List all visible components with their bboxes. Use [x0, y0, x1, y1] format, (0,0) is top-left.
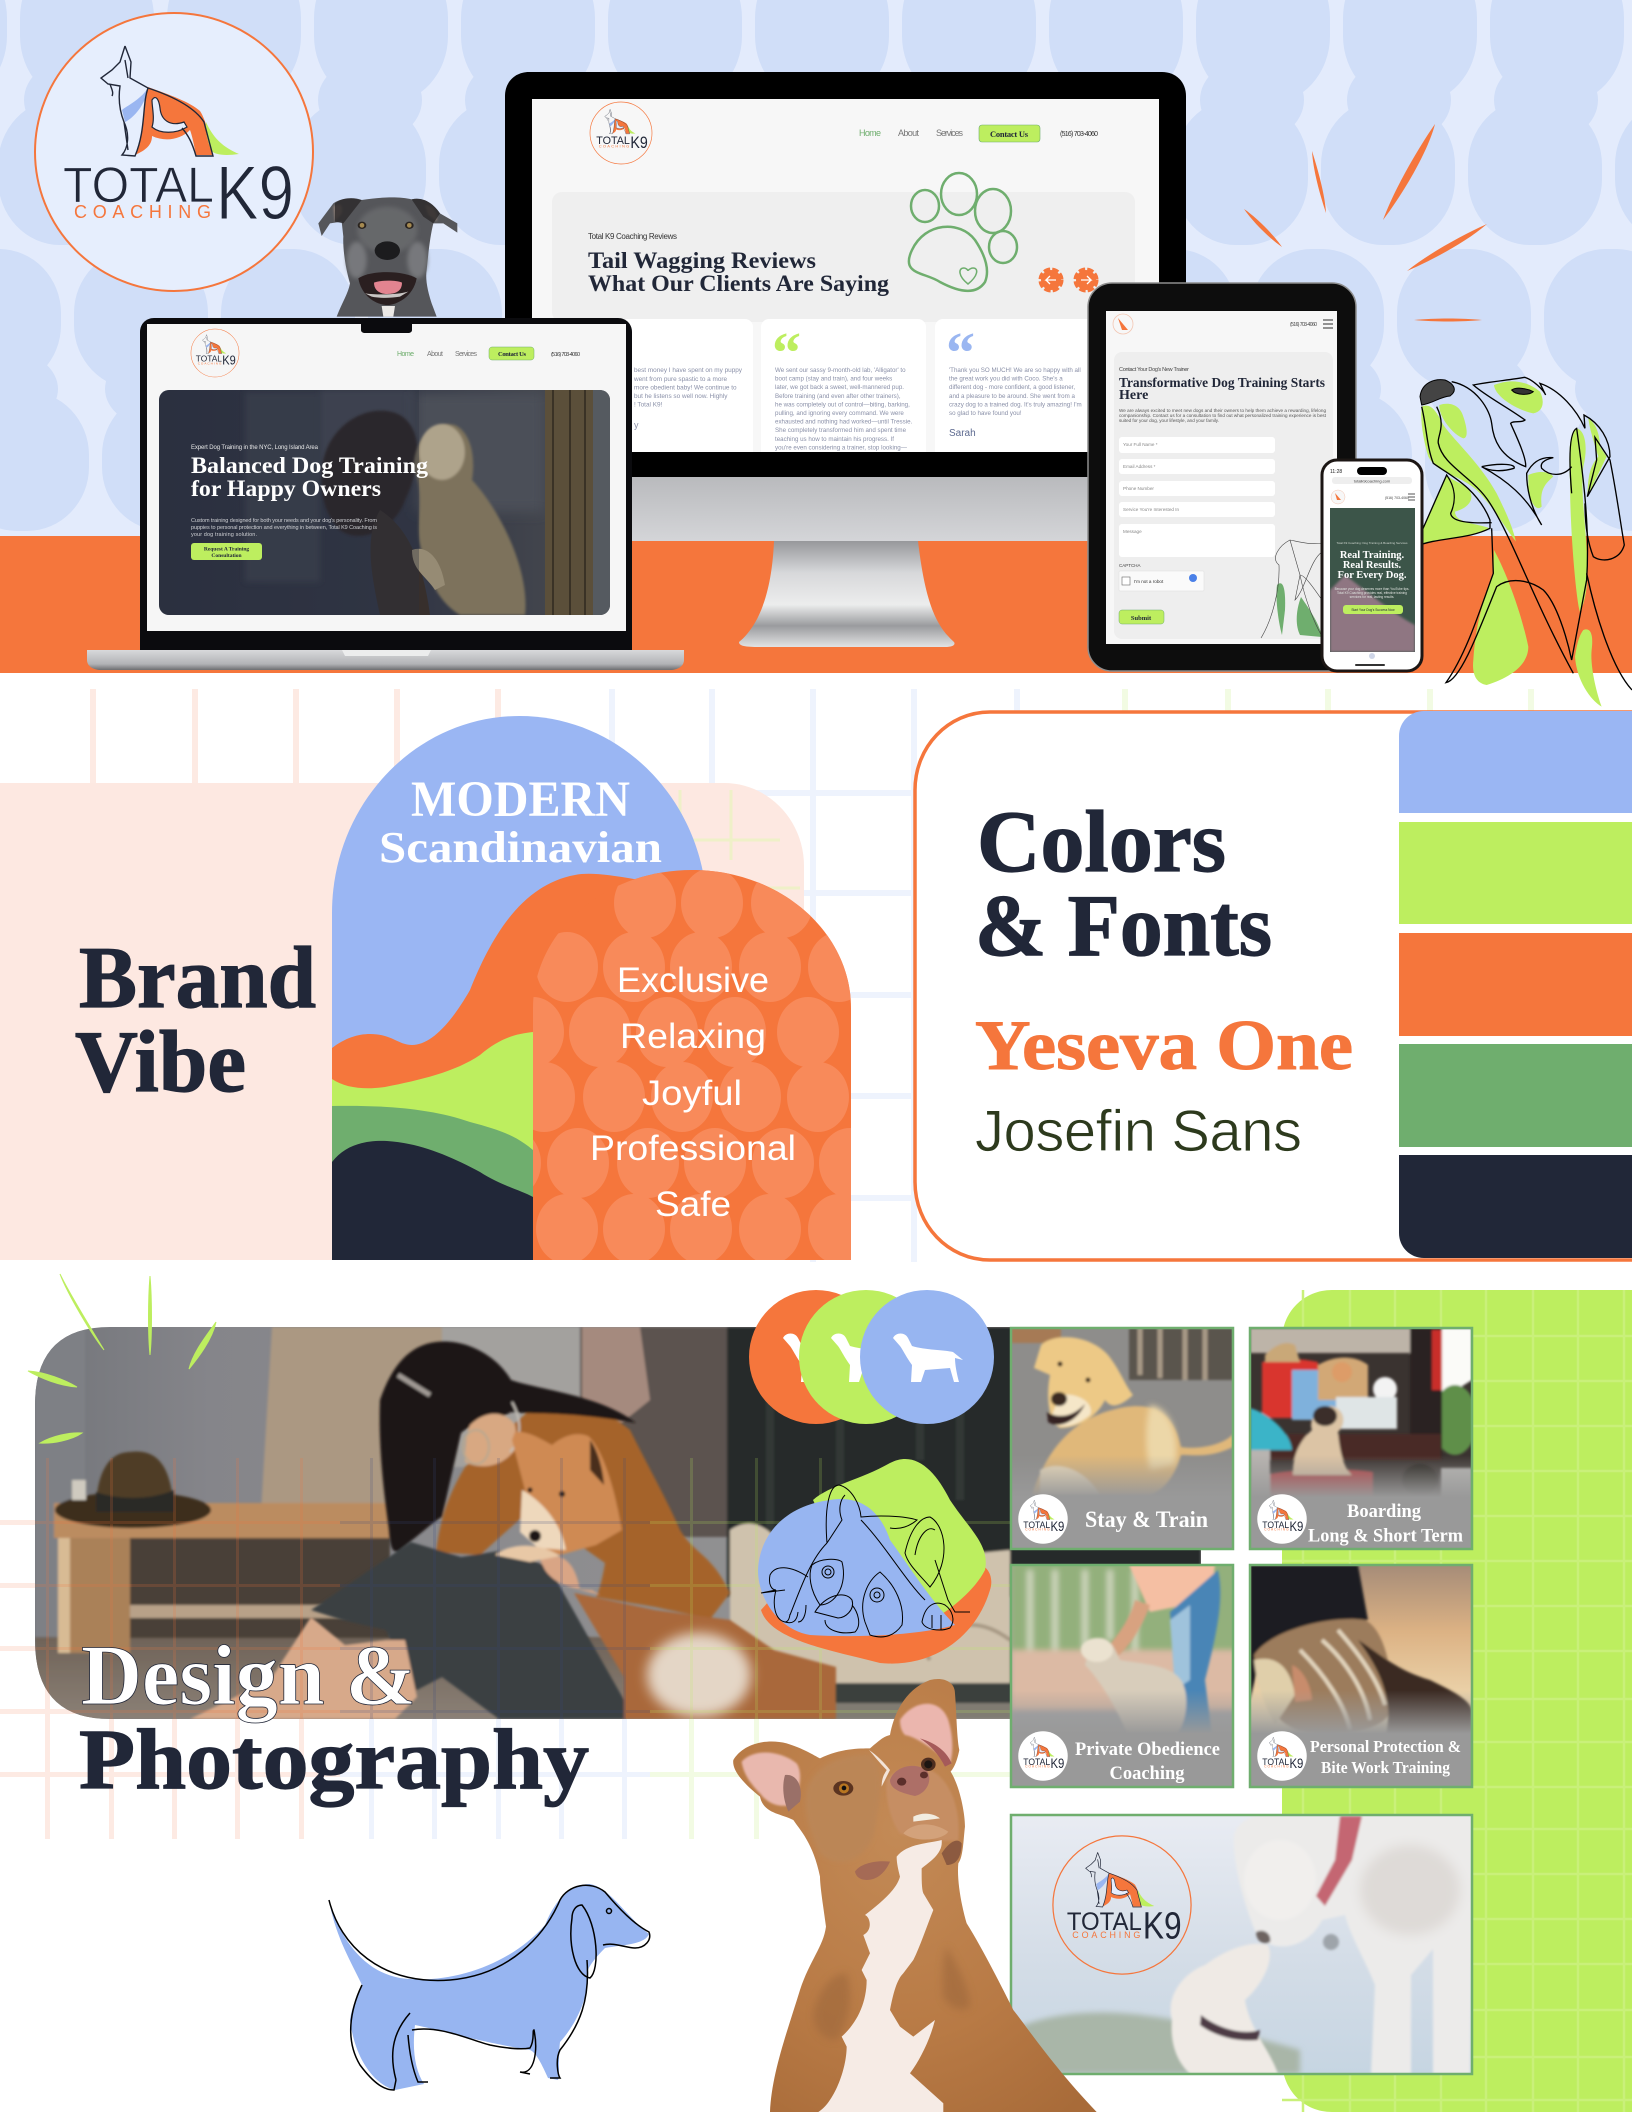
- laptop hero text: Request A Training: [204, 546, 249, 552]
- laptop base: [87, 650, 684, 670]
- tile caption: Stay & Train: [1085, 1507, 1208, 1532]
- laptop hero text: Balanced Dog Training: [191, 453, 429, 478]
- tile logo: [1257, 1494, 1307, 1544]
- tile logo: TOTAL: [1262, 1757, 1289, 1767]
- image tile: Personal Protection: [1250, 1565, 1472, 1787]
- tile logo: [1018, 1731, 1068, 1781]
- laptop hero text: for Happy Owners: [191, 476, 381, 501]
- phone hero image: For Every Dog.: [1338, 570, 1407, 581]
- tile logo: K9: [1289, 1519, 1303, 1534]
- phone bottom bar: [1355, 664, 1385, 666]
- device: phone: (516) 703-4060: [1385, 496, 1409, 500]
- laptop navigation: Services: [455, 351, 478, 358]
- eyes: [833, 1781, 853, 1796]
- review card left: [624, 319, 751, 430]
- laptop hero image: [159, 390, 610, 615]
- heading: Colors & Fonts: & Fonts: [975, 878, 1272, 975]
- illustration: bulldog line art on blobs: [758, 1459, 991, 1664]
- banner logo: K9: [1143, 1905, 1182, 1947]
- monitor navigation: (516) 703-4060: [1060, 131, 1098, 138]
- heading: Design & Photography: Photography: [79, 1711, 589, 1807]
- tablet form fields: Submit: [1131, 615, 1152, 622]
- device: phone: 11:28: [1330, 469, 1342, 475]
- monitor navigation: About: [898, 128, 919, 138]
- tablet heading: Here: [1119, 388, 1148, 403]
- tablet body: [1088, 283, 1356, 671]
- heading: Colors & Fonts: [975, 794, 1272, 975]
- phone hero image: [1330, 508, 1415, 652]
- phone hero image: Because your dog deserves more than YouTube tips.: [1335, 587, 1410, 591]
- text: Modern Scandinavian: Scandinavian: [379, 823, 662, 872]
- photo: brown and white pit bull looking up: [733, 1679, 1097, 2112]
- tablet heading: Transformative Dog Training Starts: [1119, 376, 1326, 391]
- review card middle: She completely transformed him and spent time: [775, 427, 907, 434]
- review card right: Sarah: [949, 428, 976, 439]
- text: brand attributes: Safe: [655, 1185, 731, 1224]
- phone hero image: Total K9 Coaching provides real, effective training: [1337, 591, 1407, 595]
- hair: [380, 1342, 636, 1551]
- review card left: but he listens so well now. Highly: [634, 393, 728, 400]
- tablet form panel: [1114, 352, 1333, 639]
- monitor navigation: [859, 125, 1098, 142]
- device: phone: totalk9coaching.com: [1354, 478, 1391, 484]
- panel: colors and fonts: [915, 711, 1632, 1260]
- banner logo: [1053, 1836, 1191, 1974]
- review card middle: We sent our sassy 9-month-old lab, 'Alligator' to: [775, 367, 906, 374]
- font sample: Josefin Sans: Josefin Sans: [975, 1099, 1302, 1164]
- tile logo: K9: [1050, 1519, 1064, 1534]
- monitor screen: Total K9 Coaching Reviews: [588, 232, 677, 241]
- review card middle: teaching us how to maintain his progress. If: [775, 436, 894, 443]
- tablet form fields: I'm not a robot: [1134, 579, 1164, 584]
- tablet form fields: Phone Number: [1123, 486, 1154, 491]
- background grid: photography section: [0, 1458, 1010, 1839]
- review card left: went from pure spastic to a more: [633, 376, 728, 383]
- banner logo: TOTAL: [1067, 1909, 1142, 1936]
- tile logo: TOTAL: [1023, 1520, 1050, 1530]
- review card right: different dog - more confident, a good listener,: [949, 384, 1075, 391]
- text: brand attributes: Joyful: [642, 1074, 742, 1113]
- review card right: “: [946, 320, 975, 385]
- review card middle: he was completely out of control—biting, barking,: [775, 401, 910, 408]
- tile caption: Coaching: [1110, 1764, 1185, 1784]
- image tile: Boarding: [1250, 1328, 1477, 1549]
- tile caption: [1308, 1502, 1464, 1546]
- review card left: more obedient baby! We continue to: [634, 384, 737, 392]
- legs: [190, 1617, 417, 1719]
- phone hero image: services for real, lasting results.: [1350, 595, 1394, 599]
- review card right: the great work you did with Coco. She's a: [949, 376, 1063, 383]
- small white dog: [1171, 1944, 1278, 2074]
- tablet form fields: CAPTCHA: [1119, 563, 1141, 568]
- chest white patch: [818, 1840, 943, 2112]
- heading: Brand Vibe: Vibe: [75, 1014, 246, 1111]
- review card middle: you're even considering a trainer, stop looking—: [775, 444, 908, 451]
- heading: Brand Vibe: [75, 930, 316, 1111]
- text: brand attributes: Exclusive: [617, 961, 769, 1000]
- tablet heading: [1119, 367, 1327, 423]
- laptop hero text: your dog training solution.: [191, 532, 257, 538]
- device: tablet: (516) 703-4060: [1290, 322, 1317, 328]
- dog body: [574, 1593, 836, 1719]
- review card left: best money I have spent on my puppy: [634, 367, 743, 374]
- text: Modern Scandinavian: MODERN: [411, 772, 630, 828]
- logo: Total K9 Coaching: K9: [216, 151, 294, 236]
- review card right: so glad to have found you!: [949, 410, 1022, 417]
- monitor logo: TOTAL: [596, 135, 630, 147]
- device: phone: [1322, 460, 1422, 671]
- tile logo: TOTAL: [1023, 1757, 1050, 1767]
- phone hero image: Total K9 Coaching: Dog Training & Boarding Services: [1336, 541, 1408, 545]
- tile caption: Personal Protection &: [1310, 1737, 1461, 1756]
- laptop navigation: Home: [397, 351, 414, 358]
- review card middle: exhausted and nothing had worked—until Tressie.: [775, 419, 913, 426]
- tablet line art dog: [1261, 540, 1323, 638]
- phone hero image: Start Your Dog's Success Now: [1351, 608, 1395, 612]
- heading: Colors & Fonts: Colors: [977, 794, 1226, 891]
- monitor screen: What Our Clients Are Saying: [588, 271, 890, 296]
- big white dog: [1234, 1816, 1472, 2074]
- tablet form fields: Message: [1123, 529, 1142, 534]
- laptop logo: COACHING: [198, 361, 222, 365]
- tablet screen: [1106, 311, 1337, 644]
- phone hero image: Real Results.: [1343, 560, 1402, 571]
- tile logo: COACHING: [1025, 1765, 1050, 1769]
- banner logo: COACHING: [1072, 1930, 1140, 1940]
- monitor logo: COACHING: [599, 144, 629, 149]
- laptop logo: K9: [222, 353, 236, 368]
- hands: [540, 1556, 600, 1595]
- panel: patterned top background: [0, 0, 1632, 673]
- phone mini logo: [1331, 490, 1345, 504]
- photo grid overlay: [35, 1458, 1010, 1719]
- monitor bezel: [505, 72, 1186, 477]
- laptop body: [140, 318, 632, 650]
- review card right: [937, 319, 1087, 436]
- laptop screen: [147, 324, 626, 631]
- monitor logo: K9: [630, 133, 648, 152]
- tile logo: [1257, 1731, 1307, 1781]
- tile caption: Long & Short Term: [1308, 1526, 1464, 1546]
- panel: blue arch with waves: [332, 716, 707, 1260]
- review card right: 'Thank you SO MUCH! We are so happy with all: [949, 367, 1081, 374]
- monitor stand: [739, 541, 955, 647]
- laptop navigation: Contact Us: [498, 351, 526, 358]
- laptop navigation: [397, 347, 580, 360]
- monitor navigation: Home: [859, 128, 881, 138]
- review card middle: “: [772, 320, 801, 385]
- laptop hero text: Expert Dog Training in the NYC, Long Island Area: [191, 445, 319, 451]
- font sample: Yeseva One: Yeseva One: [975, 1007, 1353, 1085]
- tablet form fields: Service You're Interested In: [1123, 507, 1179, 512]
- image banner: two white dogs with logo: [1011, 1815, 1472, 2074]
- laptop logo: TOTAL: [196, 354, 222, 364]
- tablet heading: We are always excited to meet new dogs and their owners to help them achieve a rewarding, lifelong: [1119, 408, 1326, 413]
- face: [465, 1414, 518, 1466]
- tile caption: [1075, 1740, 1220, 1784]
- sweater: [436, 1399, 730, 1618]
- panel: brand vibe background: [0, 783, 804, 1260]
- decoration: orange sparks: [1244, 124, 1487, 322]
- photo: grey pit bull peeking above laptop: [318, 197, 457, 317]
- reviews heading panel: [552, 192, 1135, 322]
- image tile: Private Obedience Coaching: [1011, 1560, 1241, 1790]
- tile caption: Boarding: [1347, 1502, 1422, 1522]
- decoration: lime sparks: [28, 1274, 216, 1443]
- tile logo: COACHING: [1025, 1528, 1050, 1532]
- heading: Design & Photography: Design &: [81, 1627, 416, 1723]
- review card middle: boot camp (stay and train), and four weeks: [775, 376, 892, 383]
- laptop logo: [191, 329, 239, 377]
- tile logo: COACHING: [1264, 1528, 1289, 1532]
- review card middle: later, we got back a sweet, well-mannered pup.: [775, 384, 904, 391]
- tile logo: COACHING: [1264, 1765, 1289, 1769]
- review card middle: pulling, and ignoring every command. We were: [775, 410, 904, 417]
- phone status bar: [1357, 467, 1387, 475]
- monitor screen: [532, 99, 1159, 459]
- review card middle: Before training (and even after other trainers),: [775, 393, 901, 400]
- text: brand attributes: Professional: [590, 1129, 796, 1168]
- tile caption: Private Obedience: [1075, 1740, 1220, 1760]
- heading: Design & Photography: [79, 1627, 589, 1807]
- text: brand attributes: [590, 961, 796, 1224]
- tablet heading: Contact Your Dog's New Trainer: [1119, 367, 1189, 373]
- text: brand attributes: Relaxing: [620, 1017, 766, 1056]
- background grid: brand section: [90, 689, 1534, 1262]
- tile logo: K9: [1050, 1756, 1064, 1771]
- tablet form fields: Your Full Name *: [1123, 442, 1158, 447]
- review card right: and a pleasure to be around. She went from a: [949, 393, 1075, 400]
- mouth corner: [855, 1861, 890, 1880]
- icon group: three overlapping dog circles: [749, 1290, 994, 1424]
- laptop navigation: About: [427, 351, 443, 358]
- device: laptop: [87, 318, 684, 670]
- laptop hero text: Consultation: [211, 553, 242, 559]
- tablet form fields: Email Address *: [1123, 464, 1156, 469]
- icon: paw outline: [909, 173, 1017, 291]
- laptop hero text: [191, 445, 429, 560]
- phone hero image: Real Training.: [1340, 550, 1405, 561]
- tablet form fields: [1119, 437, 1275, 624]
- muzzle: [886, 1767, 959, 1841]
- review card left: ! Total K9!: [634, 402, 663, 408]
- monitor navigation: Services: [936, 128, 964, 138]
- monitor navigation: Contact Us: [990, 129, 1029, 139]
- tile logo: TOTAL: [1262, 1520, 1289, 1530]
- tile logo: [1018, 1494, 1068, 1544]
- heading: Brand Vibe: Brand: [79, 930, 316, 1027]
- jeans: [311, 1542, 624, 1719]
- color swatches: [1399, 711, 1632, 1258]
- panel: lime grid background: [1282, 1290, 1632, 2112]
- tablet mini logo: [1113, 314, 1133, 334]
- monitor screen: Tail Wagging Reviews: [588, 248, 816, 273]
- device: desktop monitor: [505, 72, 1186, 647]
- photo: woman hugging shiba dog: [35, 1327, 1201, 1719]
- tile caption: [1310, 1737, 1461, 1777]
- laptop navigation: (516) 703-4060: [551, 352, 580, 358]
- device: tablet: [1088, 283, 1356, 671]
- review card right: crazy dog to a trained dog. It's truly amazing! I'm: [949, 401, 1082, 408]
- laptop hero text: Custom training designed for both your needs and your dog's personality. From: [191, 518, 377, 524]
- image tile: Stay & Train: [1011, 1328, 1233, 1549]
- monitor chin: [505, 477, 1186, 541]
- review card left: y: [634, 420, 639, 430]
- laptop hero text: puppies to personal protection and everything in between, Total K9 Coaching is: [191, 525, 377, 531]
- panel: orange patterned arch: [533, 870, 851, 1260]
- review card middle: [761, 319, 926, 459]
- icon: slider arrows: [1041, 270, 1096, 290]
- text: Modern Scandinavian: [379, 772, 662, 872]
- laptop camera notch: [361, 324, 412, 333]
- tile caption: Bite Work Training: [1321, 1758, 1451, 1777]
- logo: Total K9 Coaching: TOTAL: [63, 157, 214, 213]
- logo: Total K9 Coaching: [35, 13, 313, 291]
- tablet heading: suited for your dog, your lifestyle, and your family.: [1119, 418, 1219, 423]
- tablet heading: companionship. Contact us for a consultation to find out what personalized training experience is best: [1119, 413, 1327, 418]
- illustration: blue dachshund line art: [329, 1884, 650, 2090]
- dog head: [512, 1432, 622, 1555]
- illustration: line art dog with lime fills: [1415, 377, 1632, 707]
- monitor logo: [590, 102, 652, 164]
- tile logo: K9: [1289, 1756, 1303, 1771]
- logo: Total K9 Coaching: COACHING: [74, 202, 211, 222]
